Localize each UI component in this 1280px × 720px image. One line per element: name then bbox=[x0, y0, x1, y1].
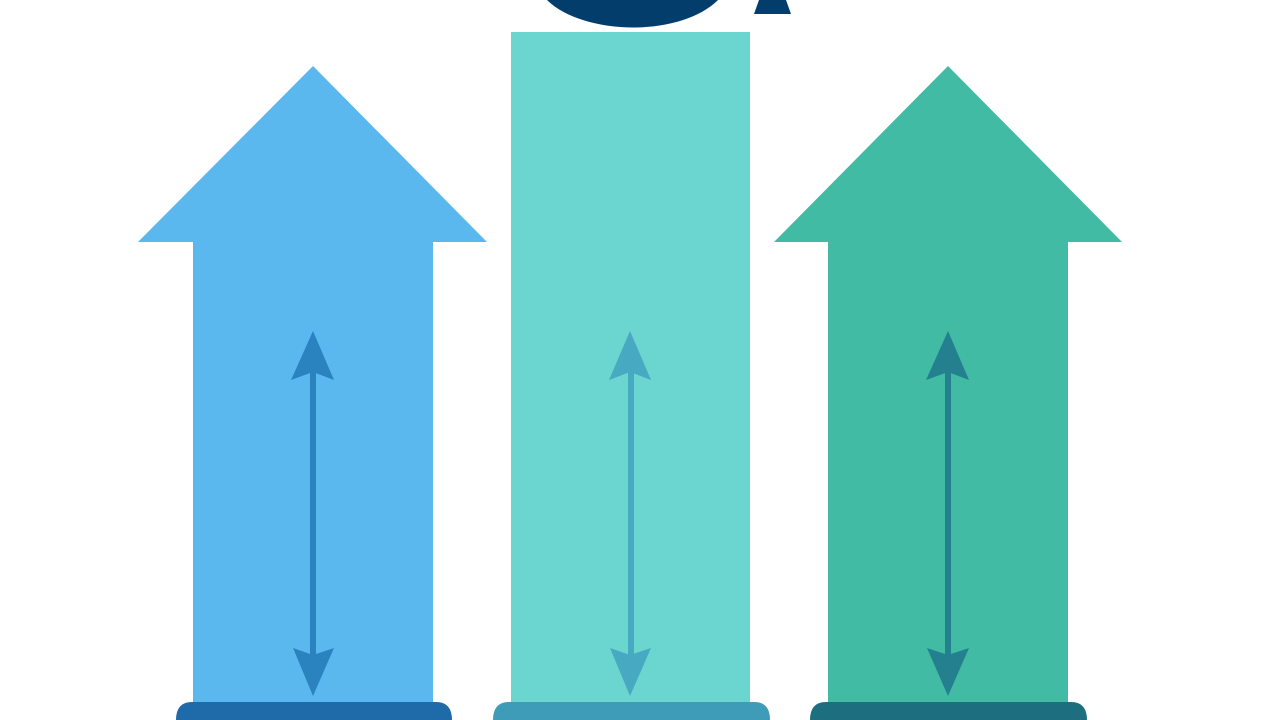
left double-headed arrow icon bbox=[291, 331, 334, 696]
cropped dark navy trapezoid at top bbox=[754, 0, 791, 14]
left base bar bbox=[176, 702, 452, 720]
left arrow body bbox=[138, 66, 487, 704]
panel: right green arrow bbox=[774, 66, 1122, 720]
right base bar bbox=[810, 702, 1087, 720]
panel: left blue arrow bbox=[138, 66, 487, 720]
right double-headed arrow icon bbox=[926, 331, 969, 696]
panel: middle teal bar bbox=[493, 32, 770, 720]
middle base bar bbox=[493, 702, 770, 720]
right arrow body bbox=[774, 66, 1122, 704]
middle bar body bbox=[511, 32, 750, 704]
middle double-headed arrow icon bbox=[609, 331, 651, 696]
cropped dark navy circle at top bbox=[547, 0, 718, 28]
